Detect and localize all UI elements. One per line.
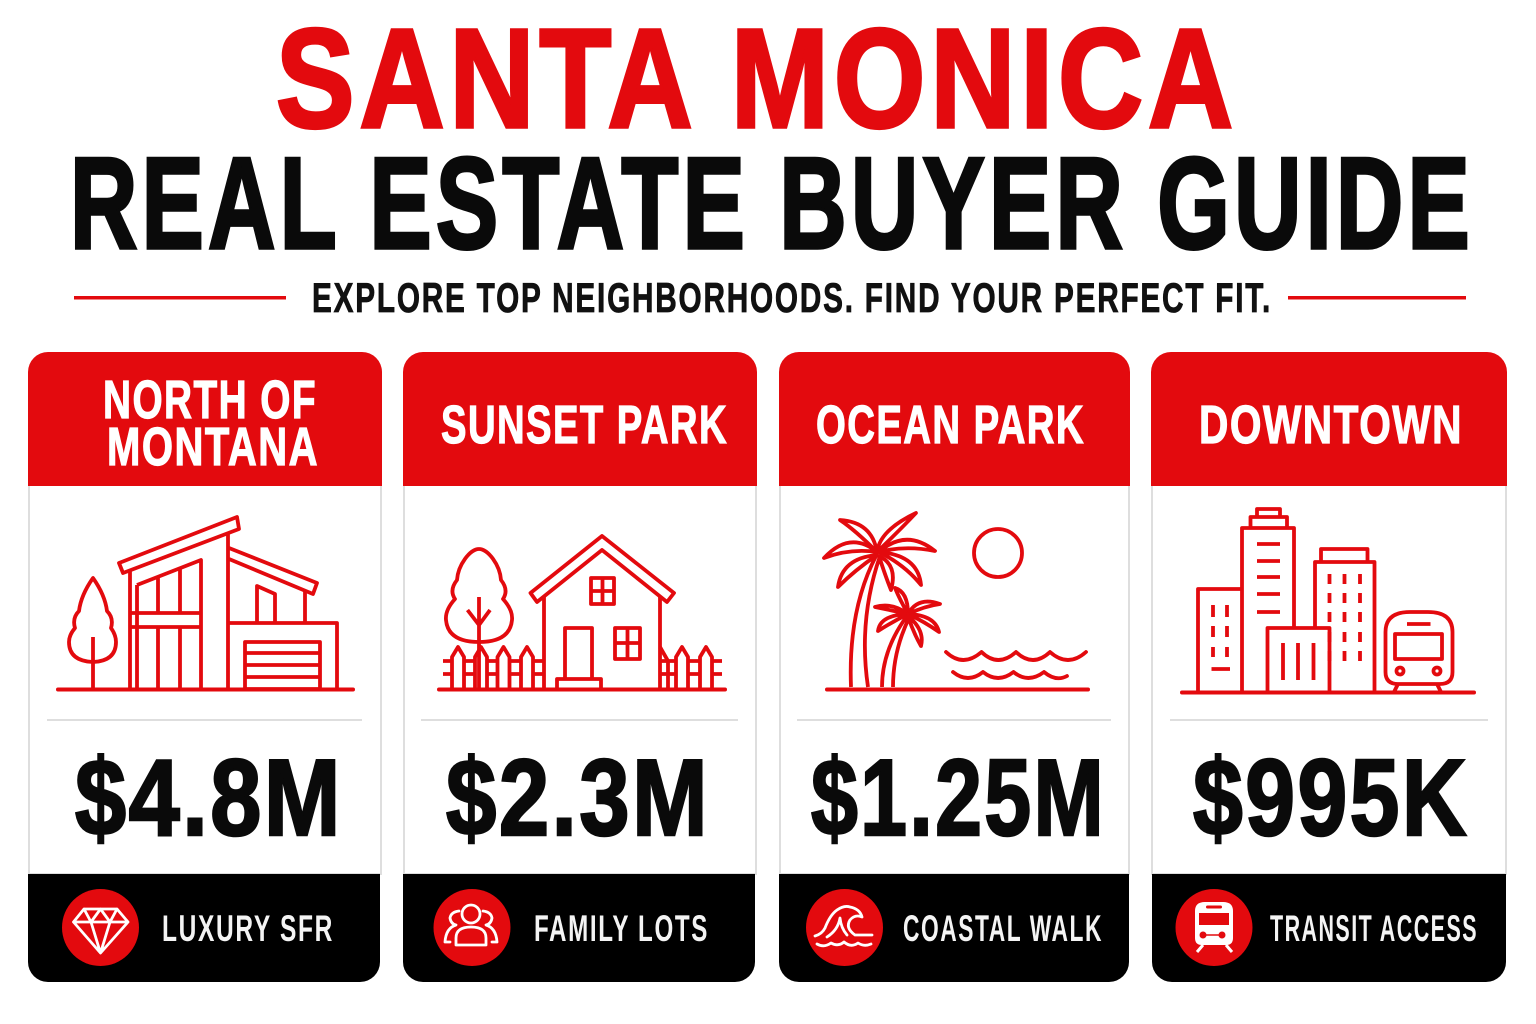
card header: NORTH OF [103, 370, 317, 430]
icon: family house with fence [439, 536, 725, 690]
card header: SUNSET PARK [441, 395, 728, 455]
card footer [28, 874, 380, 982]
card header: OCEAN PARK [816, 395, 1085, 455]
icon: train [1176, 889, 1252, 966]
icon: diamond [62, 889, 139, 966]
panel: Ocean Park [779, 352, 1130, 982]
card header: MONTANA [107, 417, 319, 477]
icon: modern house with tree [58, 517, 353, 690]
card header [403, 352, 757, 486]
icon: city skyline and train [1182, 509, 1474, 692]
card footer [403, 874, 755, 982]
panel: North of Montana [28, 352, 382, 982]
card footer [779, 874, 1129, 982]
price: $2.3M [446, 737, 710, 859]
icon: palm trees, sun and waves [824, 513, 1088, 690]
panel: Downtown [1151, 352, 1507, 982]
card header [1151, 352, 1507, 486]
card footer: FAMILY LOTS [534, 908, 709, 949]
price: $4.8M [75, 737, 343, 859]
card header [28, 352, 382, 486]
title: Santa Monica: SANTA MONICA [276, 0, 1238, 157]
card header [779, 352, 1130, 486]
price: $1.25M [811, 737, 1106, 859]
icon: ocean wave [806, 889, 883, 966]
card footer: COASTAL WALK [903, 908, 1103, 949]
icon: family group [434, 889, 510, 966]
card footer [1152, 874, 1506, 982]
card footer: LUXURY SFR [162, 908, 334, 949]
price: $995K [1193, 737, 1469, 859]
panel: Sunset Park [403, 352, 757, 982]
